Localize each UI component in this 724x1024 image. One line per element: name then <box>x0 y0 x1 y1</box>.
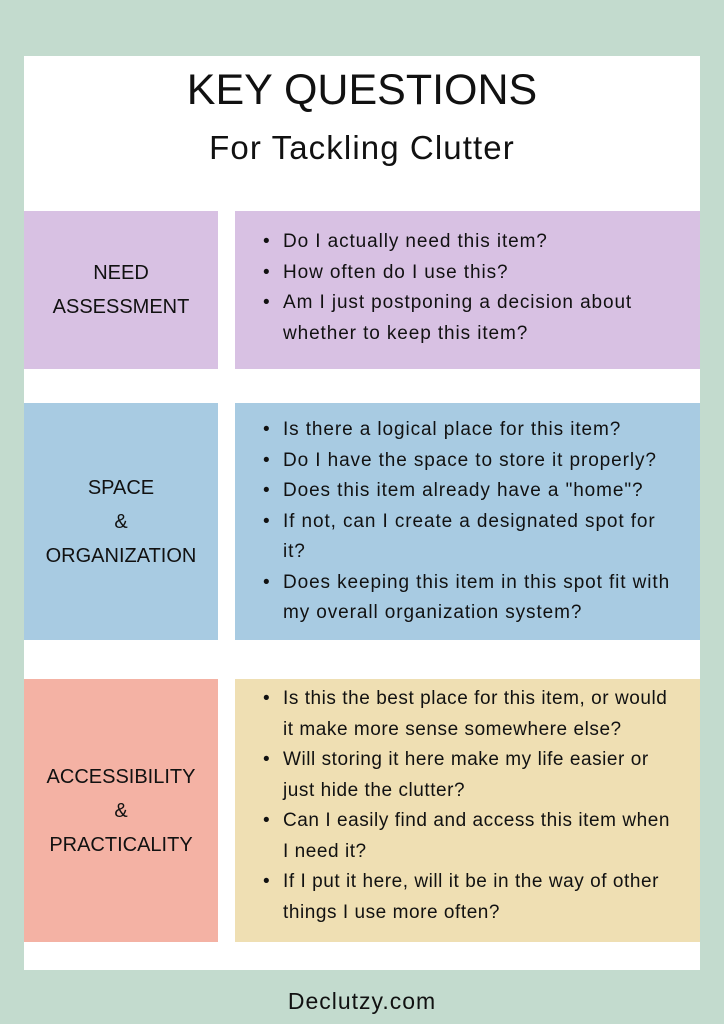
panel: space label: SPACE <box>88 476 154 498</box>
panel: accessibility questions: Is this the best place for this item, or would <box>283 688 667 709</box>
footer: Declutzy.com <box>288 988 436 1014</box>
subtitle: For Tackling Clutter <box>209 129 515 166</box>
panel: need assessment questions: How often do I use this? <box>283 262 508 282</box>
panel: accessibility label: ACCESSIBILITY <box>47 766 195 788</box>
panel: accessibility questions: If I put it here, will it be in the way of other <box>283 871 659 892</box>
panel: space questions: If not, can I create a designated spot for <box>283 510 656 532</box>
panel: space label: & <box>114 510 128 532</box>
panel: space label: ORGANIZATION <box>46 544 196 566</box>
panel: space questions: Does this item already have a "home"? <box>283 480 643 501</box>
panel: space questions: my overall organization system? <box>283 602 582 623</box>
panel: need assessment questions: Do I actually need this item? <box>283 231 548 252</box>
panel: accessibility questions: things I use more often? <box>283 902 500 922</box>
panel: need assessment questions: Am I just postponing a decision about <box>283 292 632 313</box>
panel: space questions: it? <box>283 541 306 562</box>
panel: need assessment label: ASSESSMENT <box>53 296 189 318</box>
panel: space label <box>24 403 218 640</box>
panel: need assessment label: NEED <box>93 262 149 284</box>
panel: accessibility questions: I need it? <box>283 840 367 862</box>
panel: accessibility label: & <box>114 800 128 822</box>
panel: accessibility questions <box>235 679 700 942</box>
panel: space questions <box>235 403 700 640</box>
panel: space questions: Does keeping this item in this spot fit with <box>283 572 670 592</box>
panel: space questions: Do I have the space to store it properly? <box>283 450 657 470</box>
panel: space questions: Is there a logical place for this item? <box>283 419 621 440</box>
panel: accessibility questions: just hide the clutter? <box>283 780 465 800</box>
panel: accessibility label: PRACTICALITY <box>49 834 193 856</box>
panel: accessibility label <box>24 679 218 942</box>
panel: accessibility questions: Will storing it here make my life easier or <box>283 749 649 770</box>
panel: accessibility questions: it make more sense somewhere else? <box>283 718 622 740</box>
panel: need assessment questions <box>235 211 700 369</box>
title: KEY QUESTIONS <box>187 66 537 114</box>
panel: need assessment questions: whether to keep this item? <box>283 322 528 344</box>
panel: accessibility questions: Can I easily find and access this item when <box>283 810 670 831</box>
panel: need assessment label <box>24 211 218 369</box>
